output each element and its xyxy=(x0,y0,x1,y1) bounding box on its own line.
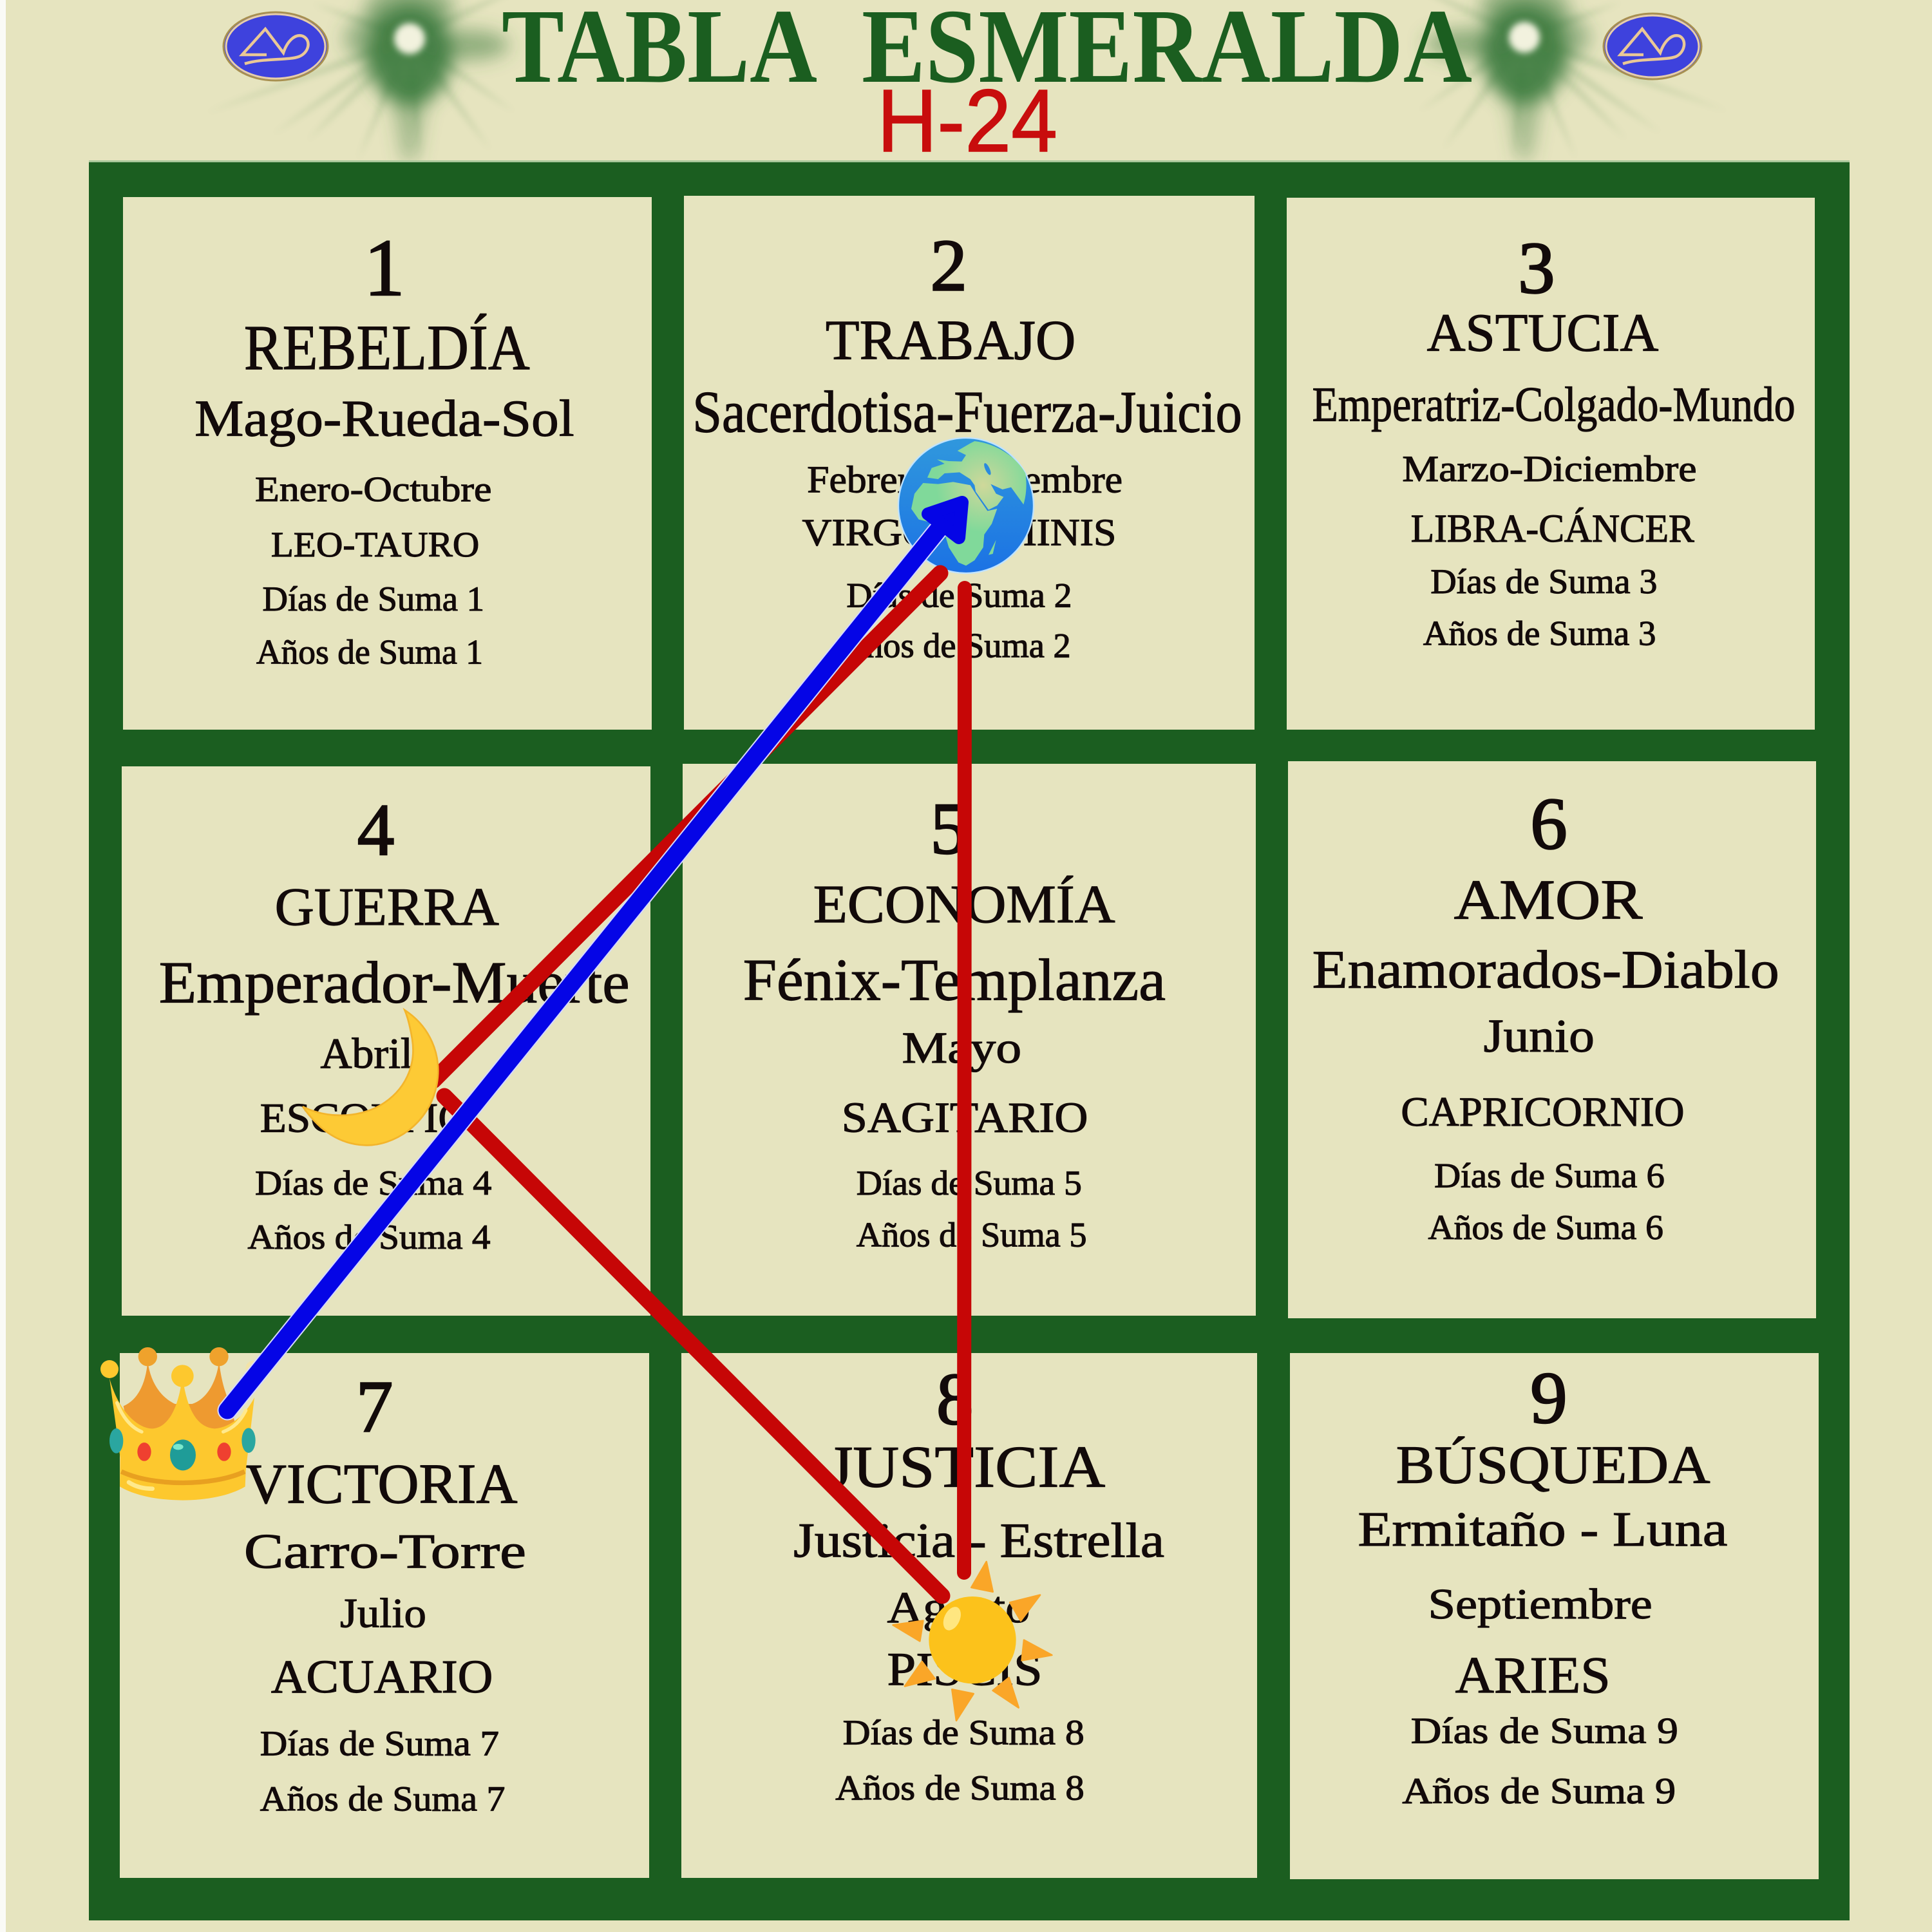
panel 8: justicia xyxy=(793,1358,1164,1808)
panel 6: amor: Junio xyxy=(1484,1010,1595,1062)
starburst right xyxy=(1405,0,1731,162)
icon: crown xyxy=(100,1347,261,1501)
panel 8: justicia: PISCIS xyxy=(887,1643,1043,1695)
panel 4: guerra: Años de Suma 4 xyxy=(248,1218,490,1256)
panel 7: victoria: VICTORIA xyxy=(245,1453,518,1515)
panel 6: amor: CAPRICORNIO xyxy=(1401,1089,1684,1135)
left white edge xyxy=(0,0,6,1932)
panel 7: victoria: 7 xyxy=(356,1365,393,1447)
icon: globe xyxy=(898,438,1034,573)
panel 5: economía xyxy=(743,788,1166,1254)
panel 2: trabajo: Días de Suma 2 xyxy=(846,576,1072,614)
panel 1: rebeldía: Enero-Octubre xyxy=(255,470,491,509)
panel 1: rebeldía: LEO-TAURO xyxy=(271,526,479,565)
arrow: red line moon to globe xyxy=(433,573,940,1081)
panel 3: astucia: Marzo-Diciembre xyxy=(1402,449,1697,489)
panel 3: astucia: ASTUCIA xyxy=(1427,303,1659,363)
panel 2: trabajo xyxy=(692,225,1242,665)
panel 5: economía: Días de Suma 5 xyxy=(857,1164,1082,1202)
panel 2: trabajo: 2 xyxy=(931,225,967,307)
panel text (grid of nine) xyxy=(159,223,1795,1819)
panel 4: guerra: Días de Suma 4 xyxy=(255,1164,491,1202)
panel 1: rebeldía: Días de Suma 1 xyxy=(263,580,484,618)
panel 7: victoria: Años de Suma 7 xyxy=(260,1780,505,1819)
panel 2: trabajo: Años de Suma 2 xyxy=(840,627,1071,665)
panel 6: amor: Años de Suma 6 xyxy=(1428,1208,1663,1247)
panel 8: justicia: JUSTICIA xyxy=(828,1434,1105,1499)
panel 6: amor xyxy=(1312,782,1779,1247)
panel 3: astucia: Emperatriz-Colgado-Mundo xyxy=(1312,377,1795,431)
panel 9: búsqueda xyxy=(1358,1357,1727,1812)
arrow: blue line crown to globe xyxy=(227,502,962,1410)
panel 4: guerra: Abril xyxy=(320,1030,413,1077)
panel 9: búsqueda: BÚSQUEDA xyxy=(1396,1435,1710,1495)
panel 1: rebeldía: Mago-Rueda-Sol xyxy=(194,390,574,447)
panel 3: astucia: Años de Suma 3 xyxy=(1423,614,1656,653)
panel 2: trabajo: Febrero-Noviembre xyxy=(807,458,1122,500)
panel 4: guerra: ESCORPIO xyxy=(260,1095,469,1141)
panel 3: astucia xyxy=(1312,227,1795,653)
subtitle H-24: H-24 xyxy=(877,71,1057,171)
cell backgrounds xyxy=(120,196,1819,1879)
panel 1: rebeldía: REBELDÍA xyxy=(244,312,530,383)
panel 5: economía: SAGITARIO xyxy=(842,1094,1088,1141)
panel 9: búsqueda: Días de Suma 9 xyxy=(1411,1710,1678,1751)
icon: right medallion xyxy=(1604,14,1701,79)
panel 7: victoria: Julio xyxy=(340,1591,426,1637)
panel 8: justicia: Días de Suma 8 xyxy=(843,1713,1084,1752)
starburst left xyxy=(203,0,529,163)
panel 8: justicia: Agosto xyxy=(887,1583,1030,1632)
icon: sun xyxy=(893,1562,1052,1721)
panel 1: rebeldía: 1 xyxy=(364,223,405,313)
panel 3: astucia: LIBRA-CÁNCER xyxy=(1411,507,1694,551)
panel 1: rebeldía: Años de Suma 1 xyxy=(256,632,483,671)
arrow: red line sun to globe xyxy=(964,588,965,1573)
icon: left medallion xyxy=(223,12,328,80)
panel 5: economía: 5 xyxy=(931,788,967,869)
panel 4: guerra xyxy=(159,789,630,1256)
panel 5: economía: Fénix-Templanza xyxy=(743,947,1166,1013)
panel 5: economía: Mayo xyxy=(902,1023,1021,1072)
panel 9: búsqueda: Ermitaño - Luna xyxy=(1358,1502,1727,1557)
panel 7: victoria: ACUARIO xyxy=(271,1651,493,1703)
panel 3: astucia: 3 xyxy=(1518,227,1555,308)
panel 8: justicia: Años de Suma 8 xyxy=(835,1768,1084,1808)
panel 2: trabajo: VIRGO-GÉMINIS xyxy=(802,511,1116,554)
panel 9: búsqueda: ARIES xyxy=(1455,1647,1611,1704)
icon: crescent moon xyxy=(303,1010,438,1145)
panel 5: economía: ECONOMÍA xyxy=(813,875,1115,934)
panel 1: rebeldía xyxy=(194,223,574,671)
panel 7: victoria: Carro-Torre xyxy=(244,1524,526,1579)
panel 2: trabajo: Sacerdotisa-Fuerza-Juicio xyxy=(692,379,1242,445)
panel 4: guerra: GUERRA xyxy=(275,877,499,937)
panel 6: amor: Días de Suma 6 xyxy=(1434,1156,1665,1195)
panel 9: búsqueda: Septiembre xyxy=(1428,1580,1653,1628)
panel 8: justicia: 8 xyxy=(936,1358,974,1440)
panel 5: economía: Años de Suma 5 xyxy=(857,1215,1087,1254)
panel 9: búsqueda: Años de Suma 9 xyxy=(1402,1771,1676,1812)
panel 3: astucia: Días de Suma 3 xyxy=(1430,562,1657,601)
panel 7: victoria: Días de Suma 7 xyxy=(260,1724,499,1763)
panel 6: amor: Enamorados-Diablo xyxy=(1312,940,1779,1000)
title xyxy=(502,0,1472,105)
panel 4: guerra: 4 xyxy=(357,789,394,871)
panel 4: guerra: Emperador-Muerte xyxy=(159,949,630,1015)
panel 6: amor: AMOR xyxy=(1454,869,1643,931)
panel 2: trabajo: TRABAJO xyxy=(826,310,1075,372)
panel 6: amor: 6 xyxy=(1530,782,1567,864)
panel 7: victoria xyxy=(244,1365,526,1819)
panel 9: búsqueda: 9 xyxy=(1530,1357,1567,1439)
arrow: red line moon to sun xyxy=(444,1096,942,1596)
panel 8: justicia: Justicia - Estrella xyxy=(793,1513,1164,1567)
